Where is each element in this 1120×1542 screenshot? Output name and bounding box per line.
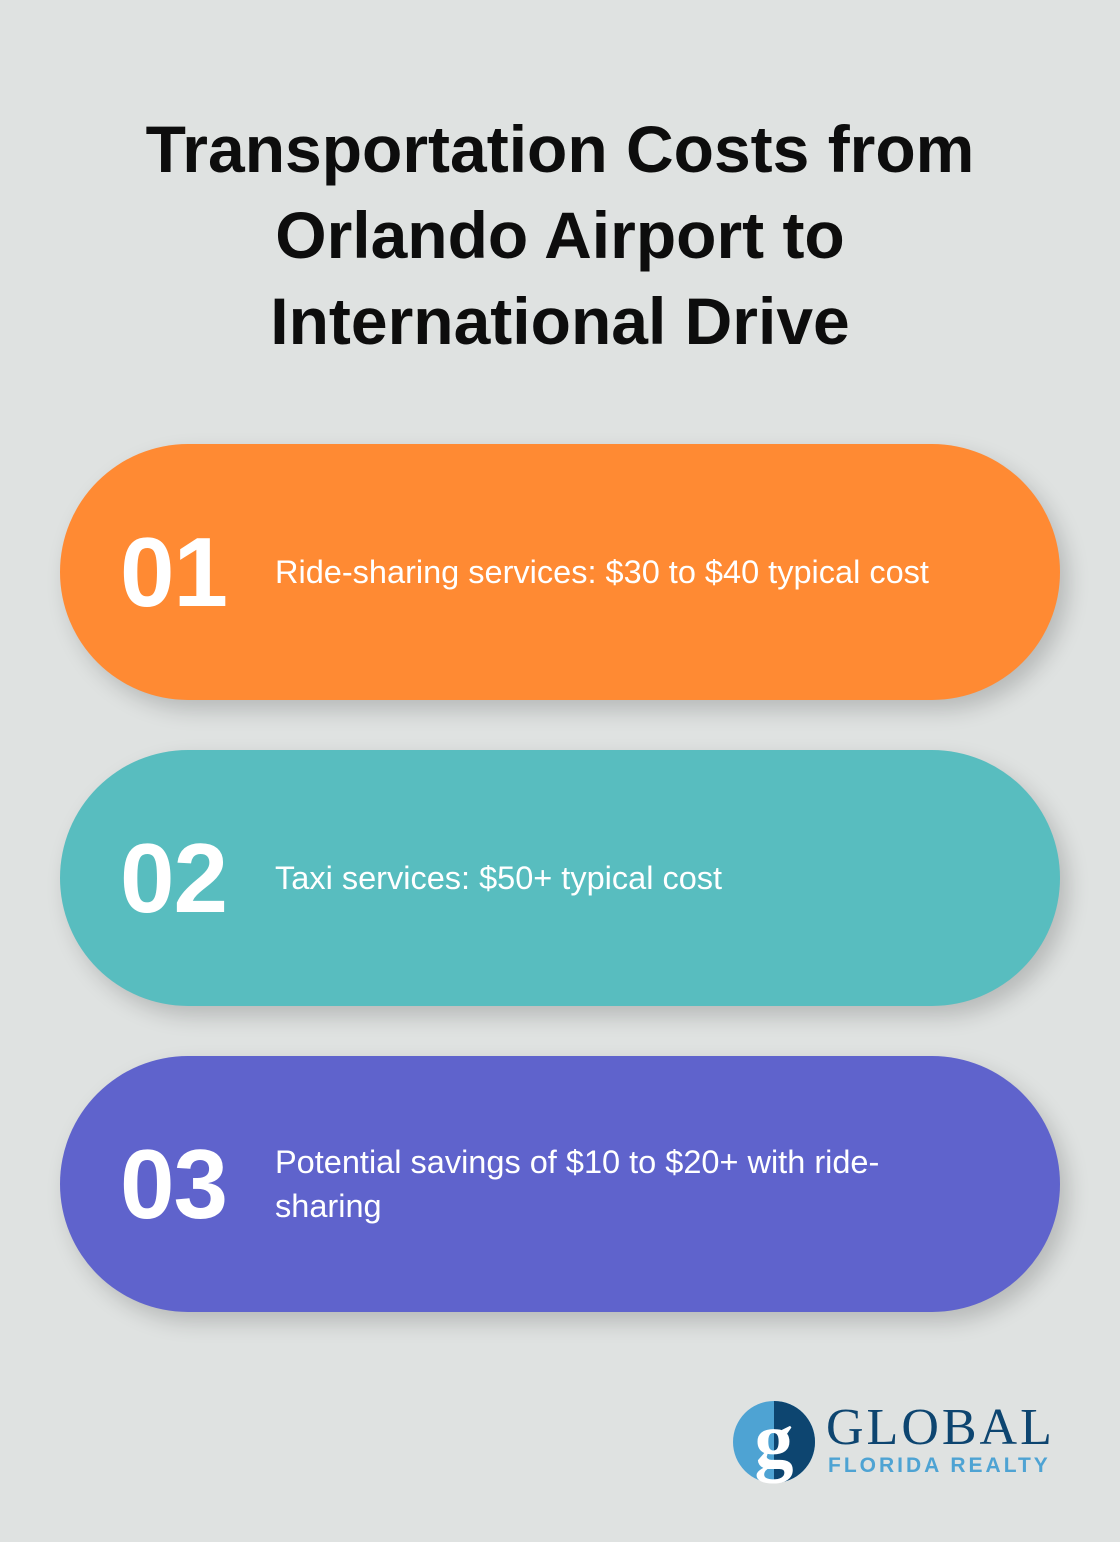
panel: savings [60, 1056, 1060, 1312]
logo text: GLOBAL [826, 1399, 1055, 1456]
number 02: 02 [120, 823, 227, 933]
number 01: 01 [120, 517, 227, 627]
logo [733, 1399, 1055, 1484]
number 03: 03 [120, 1129, 227, 1239]
title: International Drive [270, 284, 850, 358]
title: Transportation Costs from [146, 112, 974, 186]
title [146, 112, 974, 358]
text: savings: Potential savings of $10 to $20+ with ride-sharing [275, 1144, 879, 1224]
icon: logo circle [733, 1400, 815, 1484]
logo: FLORIDA REALTY [828, 1454, 1051, 1477]
panel: ride-sharing [60, 444, 1060, 700]
text: taxi: Taxi services: $50+ typical cost [275, 860, 722, 896]
text: ride-sharing: Ride-sharing services: $30 to $40 typical cost [275, 554, 929, 590]
title: Orlando Airport to [275, 198, 845, 272]
panel: taxi [60, 750, 1060, 1006]
